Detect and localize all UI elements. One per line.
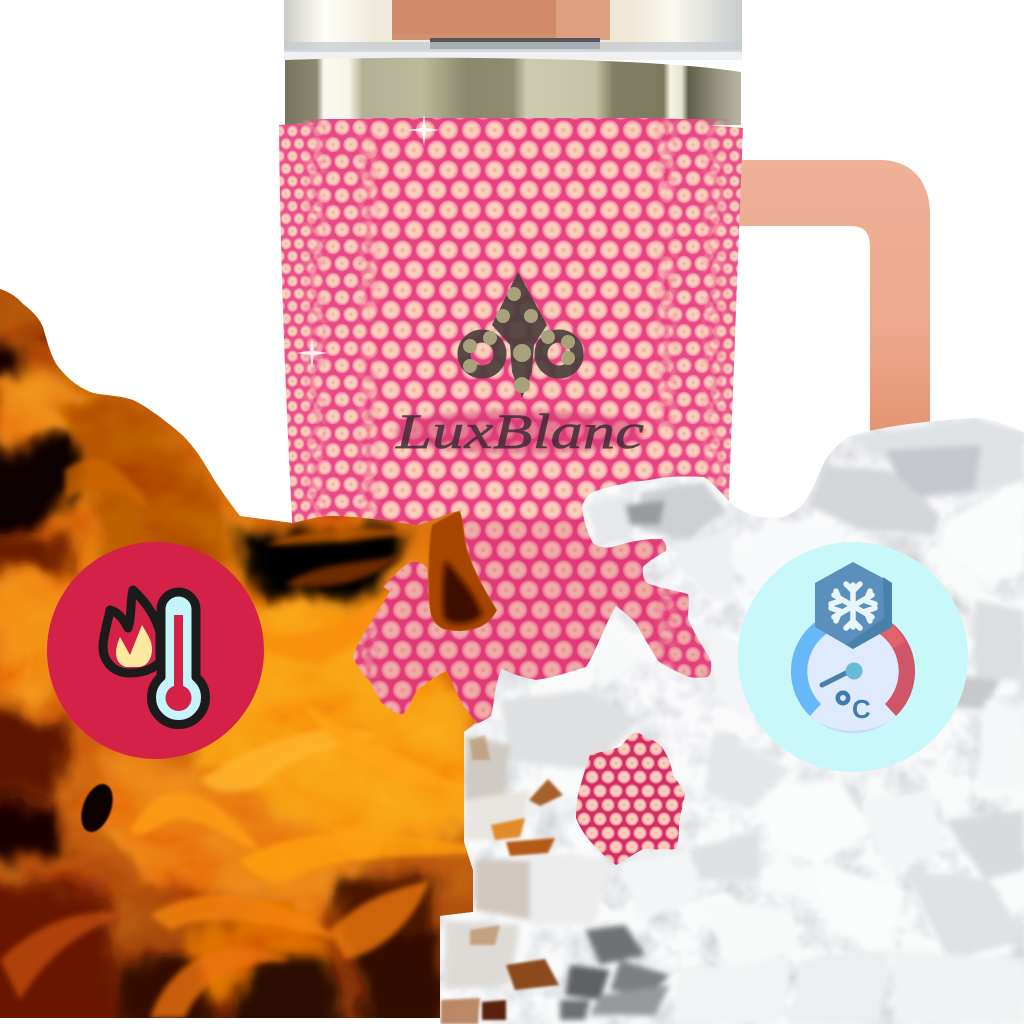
dark flame regions: [0, 342, 445, 1024]
bottom edge white strip: [0, 1018, 440, 1024]
dark flame tip near splash: [429, 511, 497, 631]
rhinestone body: [279, 114, 743, 740]
ice facets: [445, 418, 1024, 1024]
texture overlay: [0, 289, 476, 1018]
icon: gauge: [791, 609, 915, 733]
metal rim band: [285, 58, 741, 125]
icon: thermometer: [152, 592, 206, 725]
flame tongues: [0, 460, 500, 1018]
clear lid: [284, 0, 742, 60]
glitter band behind script: [395, 410, 645, 454]
sparkle: [296, 338, 328, 368]
mug handle: [735, 160, 930, 440]
logo: fleur-de-lis and script name: [395, 272, 645, 459]
icon: snowflake hexagon: [815, 562, 892, 649]
logo: fleur-de-lis and script name: LuxBlanc: [395, 403, 644, 459]
lower body shading: [340, 520, 730, 740]
icon: flame: [103, 590, 160, 673]
rhinestone island in ice: [576, 732, 685, 865]
black flame eye: [80, 783, 114, 834]
dark crystal cluster: [560, 925, 670, 1020]
tonal flame masses: [0, 365, 490, 1010]
fire panel: [0, 289, 497, 1018]
icon: gauge: C: [852, 694, 871, 724]
cold badge: [738, 542, 968, 772]
pale cyan circle: [738, 542, 968, 772]
red circle: [47, 542, 264, 759]
ice panel: [430, 410, 1024, 1024]
warm reflections: [441, 735, 563, 1024]
tumbler: [279, 0, 930, 740]
sparkle: [408, 114, 440, 146]
hot badge: [47, 542, 264, 759]
